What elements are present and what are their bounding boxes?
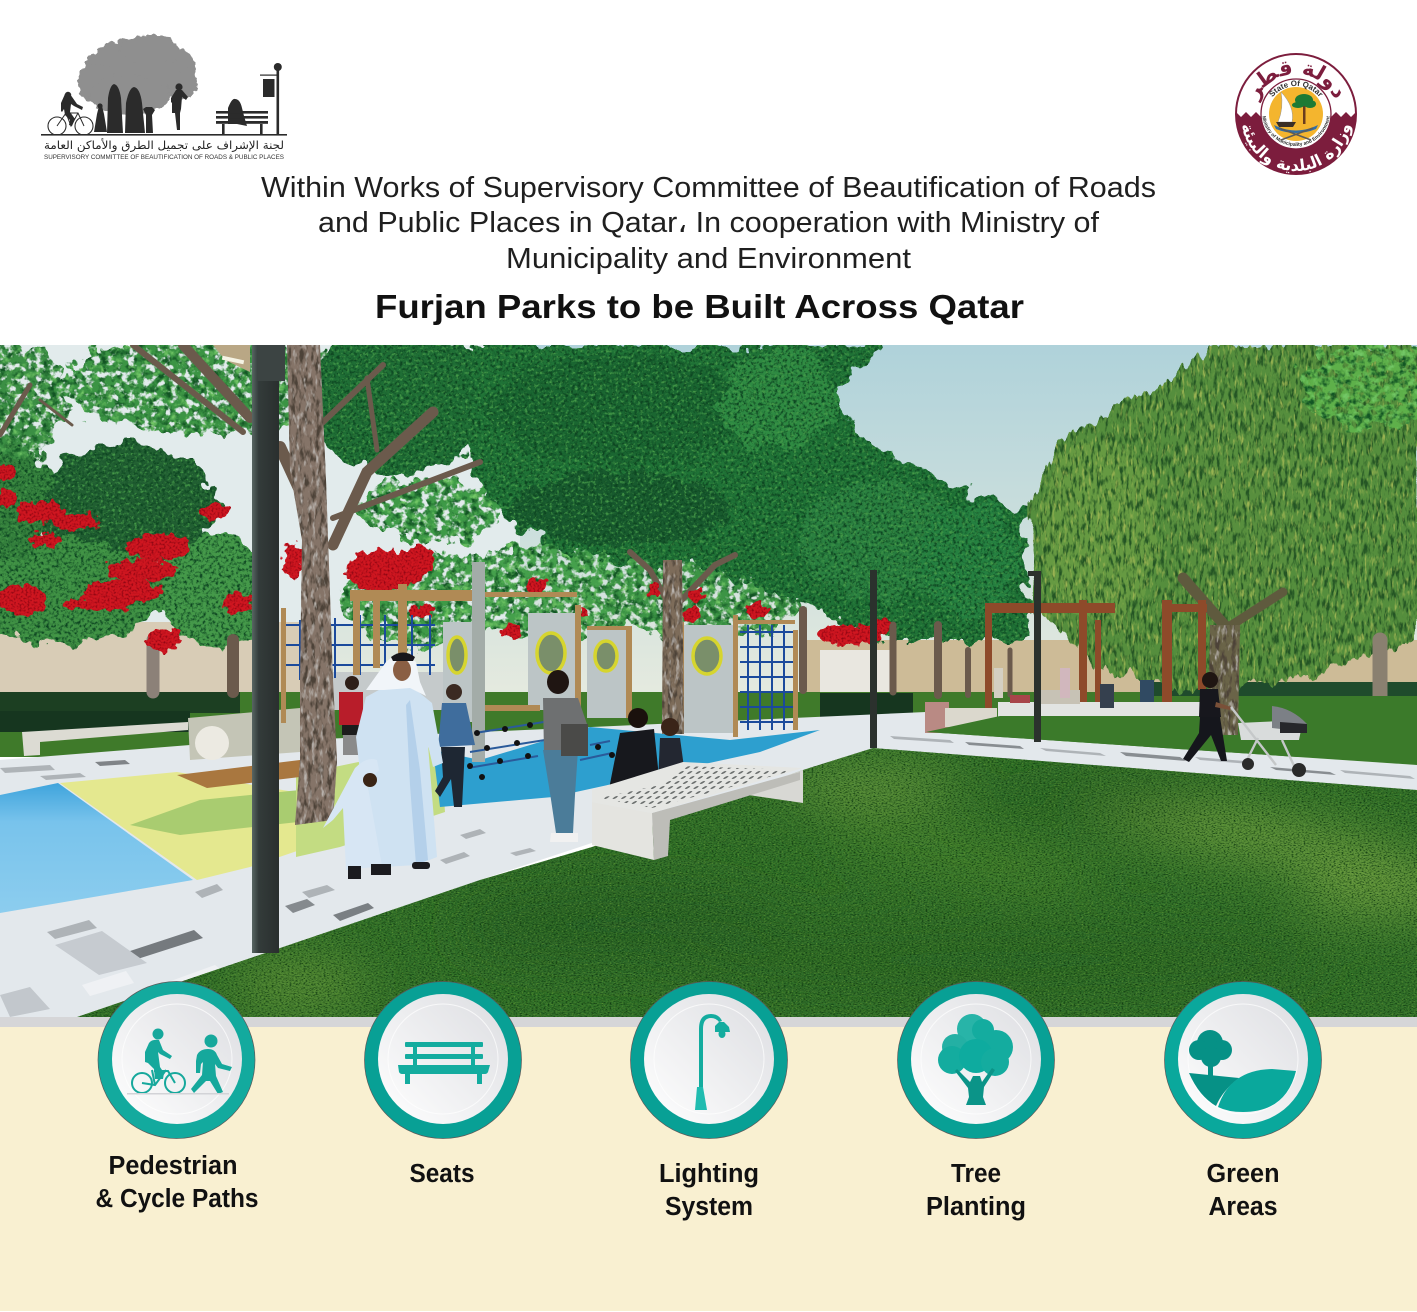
logo Arabic caption: لجنة الإشراف على تجميل الطرق والأماكن العامة	[44, 138, 284, 153]
logo: Supervisory Committee of Beautification	[41, 35, 287, 161]
lawn sunlight and shadow	[230, 770, 1417, 1011]
playground	[281, 562, 798, 780]
person: boy in blue	[435, 684, 475, 807]
far lawn and hedges	[0, 682, 1417, 757]
logo: State of Qatar Ministry emblem	[1235, 53, 1357, 175]
lawn	[77, 748, 1417, 1017]
badge	[364, 982, 522, 1138]
emblem inner seal	[1261, 79, 1331, 149]
icon: tree	[938, 1014, 1013, 1105]
label	[659, 1160, 759, 1221]
background plaza	[925, 668, 1200, 733]
yellow rings	[448, 633, 721, 674]
bench perforations	[600, 766, 795, 808]
far walls	[0, 622, 1417, 695]
label: Tree	[951, 1160, 1001, 1188]
behind-playground trees	[340, 540, 800, 648]
upper left sparse canopy	[0, 337, 500, 542]
cream footer panel	[0, 1017, 1417, 1311]
seated child	[658, 738, 686, 784]
label	[96, 1152, 258, 1213]
feature: pedestrian and cycle paths	[96, 982, 258, 1213]
bench front block	[592, 802, 654, 860]
play surface: blue centre	[433, 727, 820, 807]
label: Green	[1206, 1160, 1280, 1188]
wooden frame	[281, 584, 798, 737]
emblem dhow and palm	[1278, 92, 1293, 122]
willow bright upper leaves	[1300, 343, 1417, 427]
feature: lighting system	[630, 982, 788, 1221]
feature: tree planting	[898, 982, 1054, 1221]
left wood deck, panel and bench	[22, 708, 300, 788]
climbing rods	[467, 721, 615, 780]
emblem maroon lower band	[1236, 112, 1356, 174]
sky	[0, 345, 1417, 695]
label: & Cycle Paths	[96, 1185, 258, 1213]
park rendering photo	[0, 328, 1417, 1017]
grey band	[0, 1017, 1417, 1027]
pavement	[0, 712, 1417, 1017]
intro text	[261, 172, 1156, 275]
logo tree	[78, 35, 197, 115]
upper centre canopy	[320, 345, 479, 478]
person: child in white	[323, 759, 391, 879]
pavement tiles	[0, 736, 1415, 1017]
feature: seats	[364, 982, 522, 1188]
icon: hills and tree	[1189, 1030, 1296, 1112]
label	[926, 1160, 1026, 1221]
back lamp posts	[870, 570, 1041, 748]
label: Planting	[926, 1193, 1026, 1221]
logo: State of Qatar Ministry emblem: Ministry of Municipality and Environment	[1262, 116, 1330, 147]
label: Lighting	[659, 1160, 759, 1188]
emblem ring text: State Of Qatar	[1269, 80, 1323, 96]
icon: bench	[398, 1042, 490, 1084]
emblem outer disc	[1236, 54, 1356, 174]
intro line 3: Municipality and Environment	[506, 243, 911, 275]
label: System	[665, 1193, 753, 1221]
logo silhouettes	[41, 63, 287, 136]
willow tree	[1027, 345, 1417, 694]
person: father in white thobe	[356, 652, 443, 869]
icon: street lamp	[695, 1014, 730, 1110]
title: Furjan Parks to be Built Across Qatar	[375, 288, 1024, 325]
person: child in red	[339, 676, 363, 755]
rope nets	[285, 615, 794, 730]
label	[1206, 1160, 1280, 1221]
play surface: blue left	[0, 783, 193, 913]
left background tree	[0, 440, 270, 648]
badge	[630, 982, 788, 1138]
badge	[898, 982, 1054, 1138]
main lamp post	[213, 345, 285, 953]
icon: cyclist and walker	[127, 1028, 232, 1094]
metal pole	[472, 562, 485, 762]
badge	[98, 982, 255, 1138]
main central canopy	[470, 345, 1030, 640]
emblem Arabic top text: دولة قطر	[1255, 62, 1341, 104]
seated woman	[607, 729, 660, 799]
bench with seated people	[592, 708, 803, 860]
far panel	[333, 672, 443, 710]
play surface: yellow-green	[60, 772, 300, 880]
emblem Arabic bottom text: وزارة البلدية والبيئة	[1242, 125, 1353, 174]
bench underside	[652, 772, 800, 860]
person: standing woman	[543, 670, 588, 842]
feature: green areas	[1164, 982, 1322, 1221]
red flowering foliage	[0, 464, 890, 652]
background pergola	[985, 600, 1207, 708]
bench top	[592, 762, 803, 813]
panels	[443, 613, 734, 733]
badge	[1164, 982, 1322, 1138]
intro line 1: Within Works of Supervisory Committee of Beautification of Roads	[261, 172, 1156, 204]
label: Areas	[1208, 1193, 1278, 1221]
person: woman with stroller	[1183, 672, 1307, 777]
label: Pedestrian	[108, 1152, 238, 1180]
bench right leg	[745, 770, 803, 803]
intro line 2: and Public Places in Qatar، In cooperation with Ministry of	[318, 207, 1100, 239]
play surface: yellow-green centre	[296, 745, 445, 857]
back lawn	[926, 696, 1417, 765]
logo English caption: SUPERVISORY COMMITTEE OF BEAUTIFICATION OF ROADS & PUBLIC PLACES	[44, 154, 285, 161]
tree branches	[0, 345, 1380, 710]
play surface: green shadow	[130, 790, 300, 835]
label: Seats	[410, 1160, 474, 1188]
tree trunks	[287, 345, 1240, 825]
